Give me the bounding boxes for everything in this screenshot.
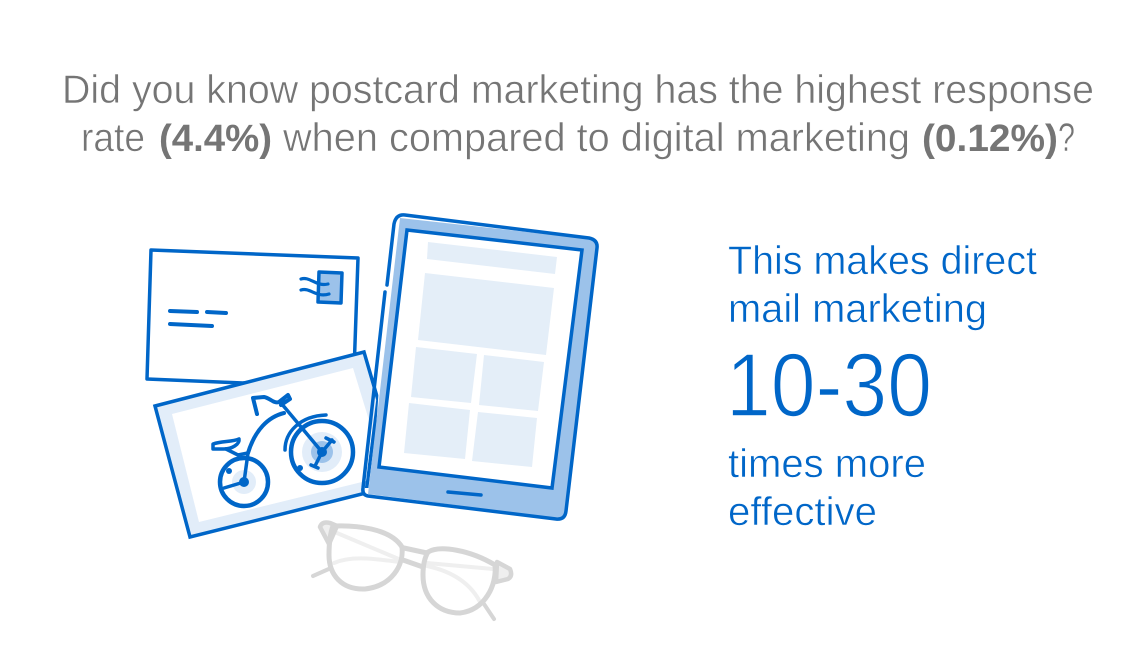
callout: direct mail effectiveness: times more — [728, 442, 926, 486]
heading: postcard response rate question: (4.4%) — [159, 118, 272, 160]
tablet home button — [448, 492, 481, 495]
icon: bicycle — [213, 395, 353, 506]
callout: direct mail effectiveness — [726, 239, 1037, 534]
heading: postcard response rate question: when compared to digital marketing — [282, 116, 910, 160]
heading: postcard response rate question: Did you know postcard marketing has the highest response — [62, 68, 1094, 112]
heading: postcard response rate question: rate — [81, 116, 145, 160]
icon: stamp — [318, 272, 342, 303]
heading: postcard response rate question: (0.12%) — [922, 118, 1058, 160]
illustration: envelope — [147, 250, 358, 383]
callout: direct mail effectiveness: effective — [728, 490, 877, 534]
illustration: tablet — [363, 215, 597, 519]
callout: direct mail effectiveness: mail marketing — [728, 287, 987, 331]
illustration: glasses — [313, 522, 511, 619]
tablet screen — [379, 230, 582, 488]
illustration: postcard with bicycle — [155, 352, 378, 537]
heading: postcard response rate question — [62, 68, 1094, 160]
heading: postcard response rate question: ? — [1058, 116, 1075, 160]
big number: 10-30: 10-30 — [726, 336, 932, 436]
callout: direct mail effectiveness: This makes direct — [728, 239, 1037, 283]
